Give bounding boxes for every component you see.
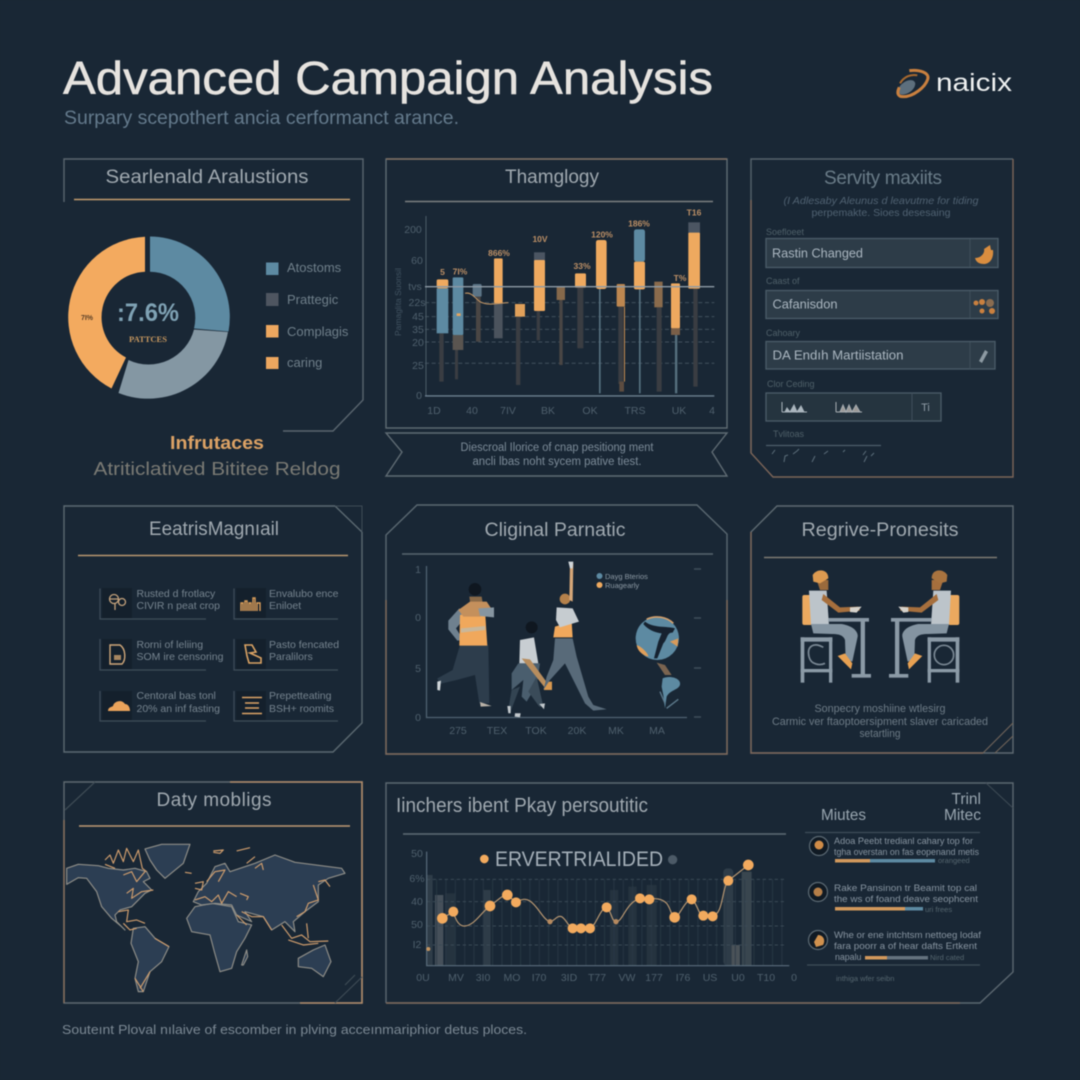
title: Advanced Campaign Analysis: [63, 52, 713, 104]
notes column heading: Trinl: [951, 791, 981, 808]
chart axes: TOK: [525, 725, 547, 737]
feature item 2: [234, 588, 339, 619]
icon: cloud: [108, 701, 130, 711]
x axis labels: 7IV: [500, 405, 516, 417]
icon: note one: [810, 836, 828, 856]
y axis labels: 0: [416, 390, 422, 402]
panel caption: Sonpecry moshiine wtlesirg: [814, 703, 946, 715]
legend: Atostoms: [287, 260, 342, 275]
panel: features: [64, 506, 362, 752]
chart axes: [415, 564, 701, 737]
notes column heading: [805, 791, 981, 832]
field: source: [766, 227, 998, 268]
field: source: Rastin Changed: [772, 246, 863, 260]
y axis labels: [409, 848, 425, 951]
bar value labels: [440, 208, 702, 283]
feature item 4: Pasto fencated: [269, 639, 339, 651]
x axis labels: 0U: [416, 972, 430, 984]
legend: caring: [287, 355, 322, 370]
icon: orange dots: [974, 299, 995, 314]
feature item 1: Rusted d frotlacy: [136, 588, 216, 600]
x axis labels: MO: [504, 972, 520, 984]
x axis labels: T10: [757, 972, 775, 984]
chart axes: 1: [415, 564, 421, 576]
sparkline axis: [766, 429, 881, 462]
chart axes: MA: [649, 725, 665, 737]
feature item 6: [234, 690, 338, 721]
y axis labels: 35: [412, 324, 424, 336]
panel heading: Thamglogy: [505, 167, 599, 188]
chart axes: 5: [415, 663, 421, 675]
feature item 4: [234, 639, 339, 670]
note item 1: orangeed: [938, 856, 970, 865]
donut chart: [68, 236, 230, 399]
donut chart: :7.6%: [117, 299, 179, 327]
feature item 4: Paralilors: [269, 651, 313, 663]
ribbon caption: [386, 433, 727, 476]
x axis labels: [427, 405, 715, 417]
x axis labels: VW: [619, 972, 636, 984]
panel: seated figures: [751, 506, 1013, 753]
icon: list lines: [242, 698, 262, 714]
icon: note two: [808, 882, 828, 902]
sparkline axis: Tvlitoas: [773, 429, 805, 439]
field: mini charts: [766, 379, 941, 421]
bar chart: [425, 216, 714, 396]
x axis labels: 177: [645, 972, 663, 984]
feature item 6: Prepetteating: [269, 690, 332, 702]
feature item 5: [100, 690, 220, 721]
panel: bar chart: [386, 159, 727, 476]
icon: note three: [808, 930, 828, 950]
feature item 2: Envalubo ence: [269, 588, 339, 600]
chart axes: 0: [415, 612, 421, 624]
x axis labels: 3ID: [561, 972, 578, 984]
y axis labels: 20: [412, 337, 424, 349]
donut chart: 7I%: [81, 315, 94, 322]
note item 2: uri frees: [925, 905, 952, 914]
note item 2: the ws of foand deave seophcent: [834, 894, 979, 904]
y axis labels: 6%: [409, 873, 425, 885]
field: cause: Cafanisdon: [772, 296, 838, 312]
y axis labels: 50: [411, 848, 423, 860]
x axis labels: BK: [541, 405, 555, 417]
legend: [266, 260, 349, 370]
field: category: Cahoary: [766, 328, 801, 338]
note item 1: [810, 836, 980, 865]
panel heading: EeatrisMagnıail: [149, 519, 279, 540]
panel description: [784, 195, 979, 219]
note item 3: Whe or ene intchtsm nettoeg lodaf: [834, 930, 982, 940]
bar value labels: 10V: [532, 234, 548, 244]
feature item 2: Eniloet: [269, 600, 301, 612]
insight text: Atriticlatived Bititee Reldog: [94, 459, 340, 479]
bar value labels: 33%: [573, 261, 591, 271]
legend: Ruagearly: [605, 581, 639, 590]
notes column heading: Miutes: [821, 807, 866, 824]
field: cause: Caast of: [766, 276, 800, 286]
logo wordmark: naicix: [936, 69, 1013, 97]
footer note: Souteınt Ploval nılaive of escomber in plving acceınmariphior detus ploces.: [62, 1022, 527, 1037]
field: category: [766, 328, 995, 369]
figure: seated left: [801, 570, 871, 683]
note item 3: [807, 930, 982, 983]
figure: globe and plant: [636, 617, 680, 708]
bar value labels: T16: [687, 208, 702, 218]
chart axes: TEX: [487, 725, 507, 737]
feature item 3: [100, 639, 224, 670]
chart axes: 20K: [568, 725, 586, 737]
panel caption: setartling: [860, 728, 900, 740]
x axis labels: 0: [791, 972, 797, 984]
icon: orange leaf: [975, 245, 993, 264]
panel heading: Servity maxiits: [824, 168, 942, 189]
panel heading: Searlenald Aralustions: [106, 167, 308, 188]
donut chart: PATTCES: [129, 334, 167, 344]
field: mini charts: Ti: [921, 402, 930, 414]
note item 3: inthiga wfer seibn: [836, 974, 894, 983]
x axis labels: OK: [582, 405, 598, 417]
field: mini charts: Clor Ceding: [767, 379, 815, 389]
bar value labels: 7I%: [453, 266, 468, 276]
x axis labels: MV: [448, 972, 464, 984]
ribbon caption: Diescroal Ilorice of cnap pesitiong ment: [460, 442, 654, 454]
note item 3: fara poorr a of hear dafts Ertkent: [834, 941, 978, 951]
x axis labels: 4: [709, 405, 715, 417]
y axis labels: 40: [411, 896, 423, 908]
feature item 3: SOM ire censoring: [136, 651, 224, 663]
chart axes: 0: [415, 712, 421, 724]
y axis labels: 22s: [409, 297, 425, 309]
note item 3: napalu: [835, 952, 862, 962]
chart axes: MK: [608, 725, 624, 737]
panel: world map: [64, 782, 362, 1003]
field: cause: [766, 276, 998, 318]
chart axes: 275: [449, 725, 467, 737]
x axis labels: 40: [466, 405, 478, 417]
y axis labels: 50: [411, 919, 423, 931]
legend: Complagis: [287, 324, 349, 339]
y axis labels: 60: [411, 255, 423, 267]
subtitle: Surpary scepothert ancia cerformanct arance.: [64, 108, 459, 129]
x axis labels: 3I0: [476, 972, 490, 984]
panel: form: [751, 159, 1013, 477]
insight heading: Infrutaces: [170, 433, 264, 453]
figure: seated right: [889, 570, 959, 683]
x axis labels: I70: [532, 972, 546, 984]
feature item 1: CIVIR n peat crop: [136, 600, 220, 612]
bar value labels: 186%: [628, 218, 650, 228]
y axis labels: [393, 224, 425, 402]
bar value labels: 120%: [591, 230, 613, 240]
notes column heading: Mitec: [944, 807, 981, 824]
y axis labels: 25: [412, 360, 424, 372]
figure: person two: [507, 621, 552, 717]
world map: [67, 844, 345, 992]
note item 3: Nird cated: [930, 953, 964, 962]
panel: trend and notes: [386, 783, 1013, 1003]
x axis labels: U0: [731, 972, 745, 984]
field: category: DA Endıh Martiistation: [772, 348, 904, 362]
feature item 5: Centoral bas tonl: [136, 690, 216, 702]
panel description: perpemakte. Sioes desesaing: [812, 207, 951, 219]
icon: logo swirl: [895, 70, 928, 98]
y axis labels: 45: [412, 311, 424, 323]
bar value labels: 5: [440, 267, 445, 277]
x axis labels: [416, 972, 797, 984]
panel caption: [772, 703, 988, 740]
feature item 3: Rorni of leliing: [136, 639, 203, 651]
panel heading: Daty mobligs: [156, 790, 272, 811]
panel: figures chart: [386, 505, 727, 754]
bar value labels: T%: [674, 273, 687, 283]
x axis labels: TRS: [624, 405, 646, 417]
note item 1: tgha overstan on fas eopenand metis: [834, 847, 980, 857]
panel heading: Regrive-Pronesits: [802, 520, 958, 541]
panel heading: Cliginal Parnatic: [484, 520, 626, 541]
x axis labels: T77: [588, 972, 606, 984]
icon: map: [245, 645, 261, 663]
x axis labels: US: [703, 972, 717, 984]
figure: person one: [437, 583, 494, 707]
feature item 1: [100, 588, 220, 619]
bar value labels: 866%: [488, 248, 510, 258]
feature item 6: BSH+ roomits: [269, 703, 334, 715]
note item 2: Rake Pansinon tr Beamit top cal: [834, 883, 977, 893]
field: source: Soefloeet: [766, 227, 805, 237]
ribbon caption: ancli lbas noht sycem pative tiest.: [472, 456, 642, 468]
x axis labels: I76: [676, 972, 690, 984]
chart legend label: ERVERTRIALIDED: [495, 848, 663, 871]
icon: pen: [979, 350, 988, 363]
y axis labels: I2: [413, 939, 422, 951]
panel description: (I Adlesaby Aleunus d leavutme for tiding: [784, 195, 979, 207]
x axis labels: 1D: [427, 405, 441, 417]
panel: donut chart: [64, 159, 363, 479]
icon: document: [110, 645, 125, 664]
note item 2: [808, 882, 979, 914]
y axis labels: Pamaglita Suonsil: [393, 268, 403, 336]
note item 1: Adoa Peebt tredianl cahary top for: [834, 836, 973, 846]
logo: [895, 69, 1013, 98]
panel heading: Iinchers ibent Pkay persoutitic: [396, 795, 648, 817]
icon: bars: [241, 598, 260, 611]
x axis labels: UK: [672, 405, 686, 417]
feature item 5: 20% an inf fasting: [136, 703, 220, 715]
legend: [596, 572, 648, 590]
icon: magnifier: [110, 594, 126, 610]
panel caption: Carmic ver ftaoptoersipment slaver caricaded: [772, 716, 988, 728]
y axis labels: 200: [404, 224, 422, 236]
legend: Dayg Bterios: [605, 572, 648, 581]
line chart: [409, 848, 797, 984]
legend: Prattegic: [287, 292, 339, 307]
y axis labels: tvs: [408, 281, 422, 293]
figure: person three: [543, 562, 607, 711]
